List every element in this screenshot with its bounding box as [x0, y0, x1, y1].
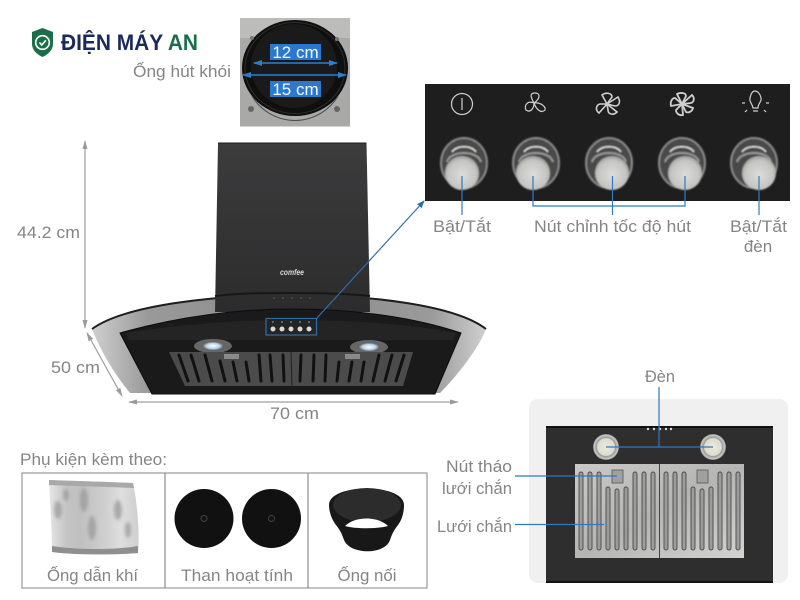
icon: light bulb [742, 91, 769, 112]
label: light button [730, 217, 787, 256]
logo [32, 28, 198, 57]
caption: Ống dẫn khí [47, 565, 138, 585]
accessory: air duct [47, 480, 139, 585]
filter [575, 464, 744, 558]
underside view [515, 387, 788, 583]
label: filter release [442, 457, 512, 498]
icon: shield [32, 28, 53, 57]
label: speed buttons: Nút chỉnh tốc độ hút [534, 217, 691, 236]
dimension: 15 cm: 15 cm [272, 80, 319, 99]
icon: fan low [525, 93, 545, 111]
accessories table [22, 473, 427, 588]
hood chimney [215, 143, 370, 312]
icon: fan medium [596, 93, 619, 114]
accessory: connector [329, 488, 404, 585]
control buttons [270, 321, 312, 332]
label: filter release: Nút tháo [446, 457, 512, 476]
grease filter [169, 352, 413, 386]
label: duct: Ống hút khói [133, 61, 231, 81]
dimension: 12 cm: 12 cm [272, 43, 319, 62]
icon: fan high [671, 93, 694, 115]
curved glass [92, 295, 486, 393]
caption: Ống nối [338, 565, 396, 585]
leader lines [515, 387, 713, 524]
control panel [425, 84, 790, 215]
label: light: Đèn [645, 367, 675, 386]
brand mark: comfee [280, 268, 304, 277]
accessory: charcoal filters [174, 489, 301, 585]
height dimension: 44.2 cm [17, 223, 80, 242]
label: filter: Lưới chắn [437, 517, 512, 536]
hood underside [120, 309, 461, 394]
knobs [441, 138, 777, 190]
lights [194, 339, 388, 354]
label: filter release: lưới chắn [442, 479, 512, 498]
depth dimension [51, 333, 122, 396]
indicator dots [647, 428, 672, 430]
label: light button: đèn [744, 237, 772, 256]
caption: Than hoạt tính [181, 566, 293, 585]
callout box and arrow [266, 201, 424, 335]
logo wordmark: ĐIỆN MÁY AN [61, 30, 198, 55]
label: power: Bật/Tắt [433, 217, 491, 236]
depth dimension: 50 cm [51, 358, 100, 377]
range hood [92, 143, 486, 394]
icon: power [452, 94, 472, 114]
lamps [593, 434, 726, 460]
label: light button: Bật/Tắt [730, 217, 787, 236]
width dimension: 70 cm [270, 404, 319, 423]
duct photo [240, 18, 350, 126]
leader lines [462, 176, 759, 215]
accessories heading: Phụ kiện kèm theo: [20, 450, 167, 469]
